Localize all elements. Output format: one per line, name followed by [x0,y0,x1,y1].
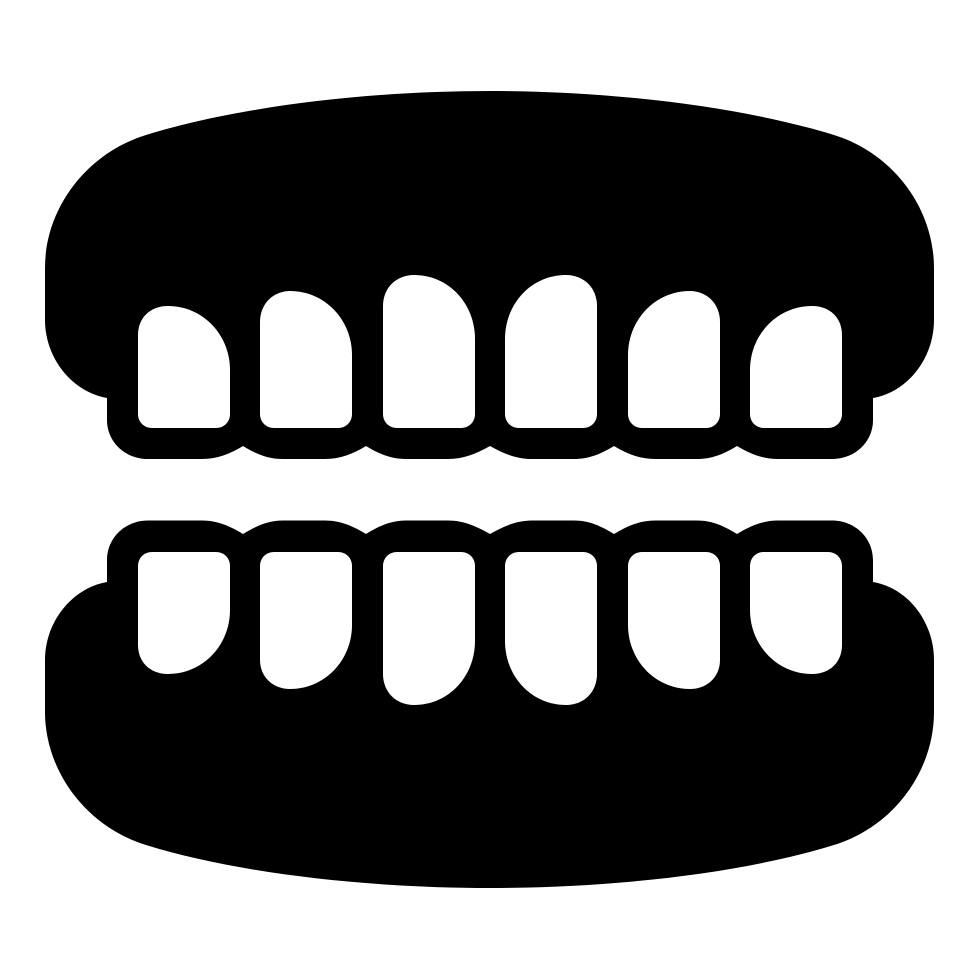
upper teeth [138,275,842,428]
upper denture [45,91,934,459]
upper gum [45,91,934,459]
lower gum [45,520,934,888]
lower denture [45,520,934,888]
lower teeth [138,552,842,705]
